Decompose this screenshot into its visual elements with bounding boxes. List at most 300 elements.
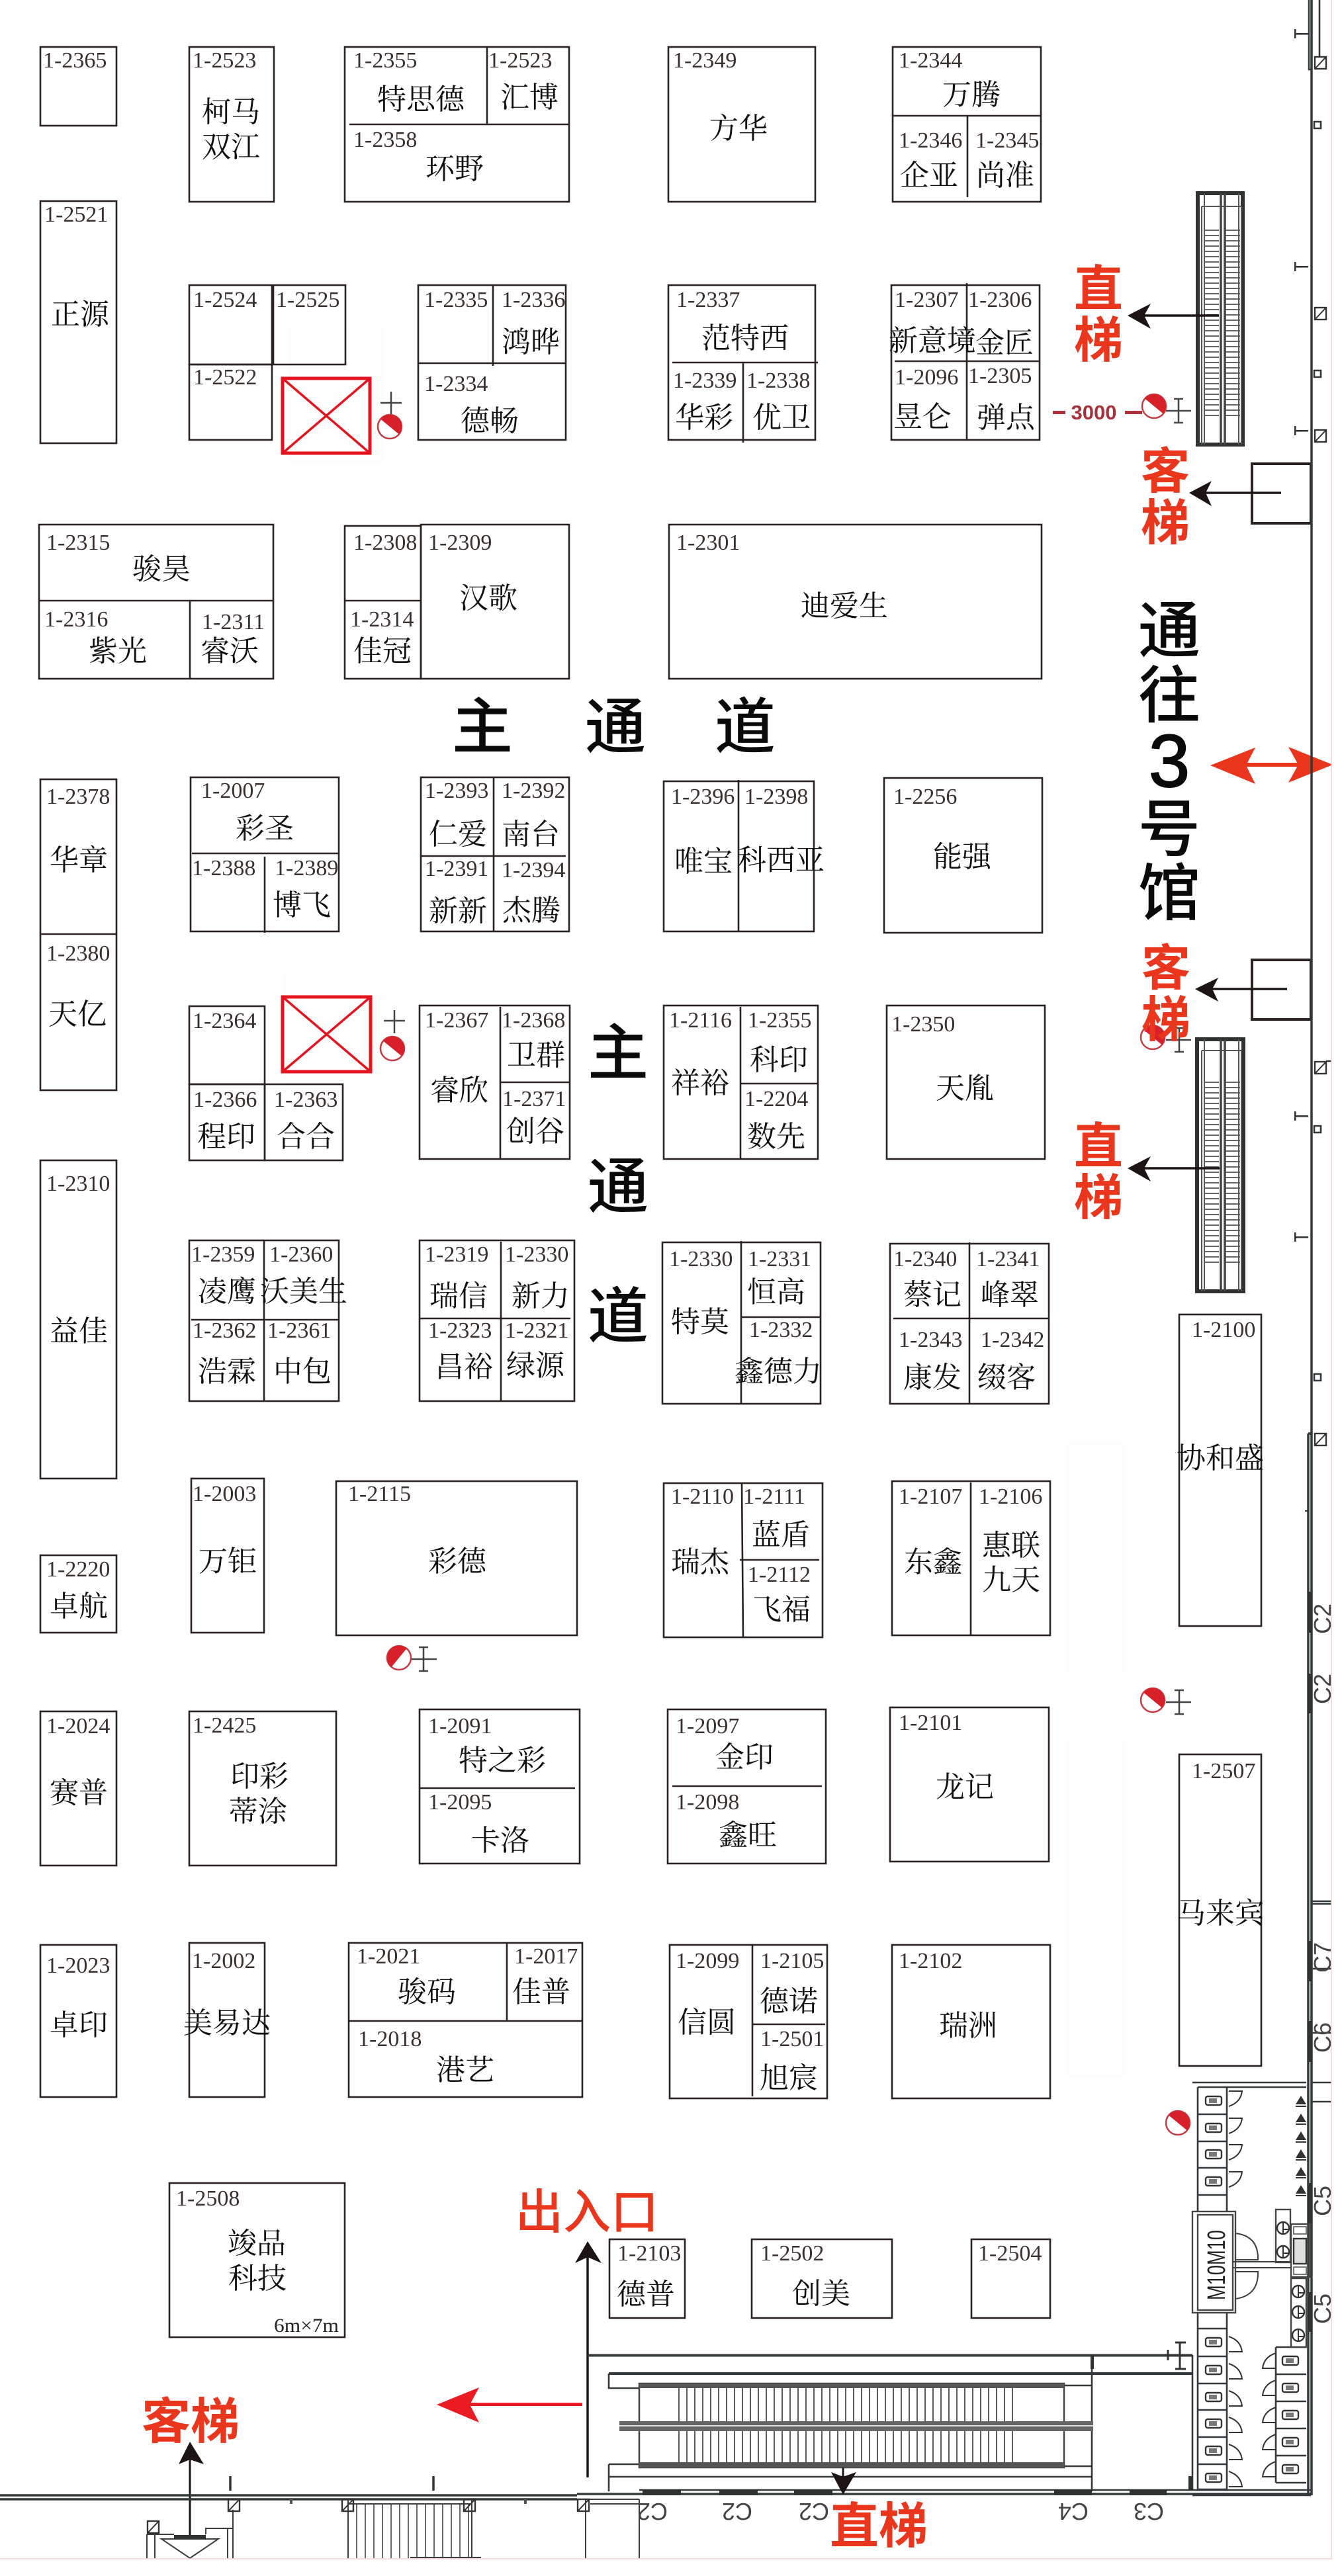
- booth block 1-2007 / 1-2388 / 1-2389: [191, 777, 339, 933]
- elevator box lower: [1252, 960, 1311, 1019]
- booth block 1-2107 / 1-2106: 惠联: [982, 1529, 1040, 1562]
- window labels C2 C2 C2 C4 C3 upside down: C2: [722, 2498, 752, 2525]
- booth block 1-2099 / 1-2105 / 1-2501: 旭宸: [760, 2062, 818, 2094]
- booth 1-2003 万钜: 万钜: [199, 1545, 257, 1578]
- booth block 1-2007 / 1-2388 / 1-2389: 1-2007: [201, 779, 265, 803]
- M10M10 room: [1192, 2211, 1292, 2313]
- booth 1-2507 马来宾: 1-2507: [1192, 1759, 1255, 1783]
- booth block 1-2337 / 1-2339 / 1-2338: 1-2338: [746, 368, 810, 393]
- booth block 1-2319 / 1-2330 / 1-2323 / 1-2321: 1-2323: [428, 1318, 492, 1343]
- booth block 1-2337 / 1-2339 / 1-2338: 1-2339: [673, 368, 737, 393]
- heading: 通往3号馆: 号: [1138, 794, 1200, 864]
- label: 直梯 top: 直: [1074, 261, 1123, 316]
- booth block 1-2393 / 1-2392 / 1-2391 / 1-2394: 仁爱: [429, 818, 487, 851]
- booth block 1-2367 / 1-2368 / 1-2371: 睿欣: [430, 1074, 488, 1107]
- booth block 1-2359 / 1-2360 / 1-2362 / 1-2361: [189, 1240, 347, 1401]
- booth block 1-2315 / 1-2316 / 1-2311: 紫光: [89, 635, 147, 667]
- upper stalls: [1198, 2091, 1242, 2195]
- booth 1-2023 卓印: 1-2023: [46, 1953, 110, 1978]
- booth block 1-2340 / 1-2341 / 1-2343 / 1-2342: 1-2341: [976, 1247, 1040, 1271]
- booth block 1-2107 / 1-2106: [892, 1481, 1050, 1635]
- booth 1-2425 印彩蒂涂: 印彩: [230, 1760, 289, 1793]
- booth 1-2256 能强: [884, 778, 1042, 933]
- booth block 1-2021 / 1-2017 / 1-2018: 1-2017: [514, 1944, 578, 1969]
- booth block 1-2110 / 1-2111 / 1-2112: 1-2111: [743, 1484, 805, 1509]
- booth block 1-2021 / 1-2017 / 1-2018: [349, 1943, 582, 2097]
- booth 1-2115 彩德: 1-2115: [348, 1482, 411, 1506]
- icon: fire hydrant 2: [380, 1010, 405, 1060]
- booth block 1-2091 / 1-2095: 卡洛: [471, 1825, 529, 1857]
- booth block 1-2340 / 1-2341 / 1-2343 / 1-2342: 1-2340: [893, 1247, 957, 1271]
- booth block 1-2110 / 1-2111 / 1-2112: 1-2110: [671, 1484, 734, 1509]
- booth block 1-2021 / 1-2017 / 1-2018: 1-2021: [357, 1944, 420, 1969]
- booth block 1-2330 / 1-2331 / 1-2332: 特莫: [671, 1306, 729, 1338]
- booth block 1-2396 / 1-2398: 唯宝: [674, 845, 733, 878]
- booth block 1-2344 / 1-2346 / 1-2345: 1-2344: [899, 48, 962, 73]
- booth block 1-2307 / 1-2306 / 1-2096 / 1-2305: 1-2306: [968, 288, 1032, 312]
- booth 1-2349 方华: 方华: [709, 112, 768, 145]
- booth 1-2310 益佳: 益佳: [50, 1315, 108, 1348]
- booth block 1-2307 / 1-2306 / 1-2096 / 1-2305: 弹点: [977, 402, 1036, 434]
- booth block 1-2315 / 1-2316 / 1-2311: 睿沃: [201, 635, 259, 667]
- booth block 1-2116 / 1-2355 / 1-2204: 科印: [750, 1044, 808, 1076]
- booth block 1-2315 / 1-2316 / 1-2311: 1-2311: [202, 610, 265, 634]
- booth 1-2508 竣品科技: 竣品: [228, 2227, 286, 2260]
- booth block 1-2091 / 1-2095: 1-2091: [428, 1714, 492, 1739]
- booth block 1-2330 / 1-2331 / 1-2332: 1-2330: [669, 1247, 733, 1271]
- booth block 1-2364 / 1-2366 / 1-2363: 程印: [197, 1121, 255, 1153]
- booth block 1-2337 / 1-2339 / 1-2338: 范特西: [701, 322, 789, 355]
- heading: 通往3号馆: 3: [1149, 720, 1190, 802]
- booth 1-2365: [40, 47, 116, 126]
- booth 1-2102 瑞洲: [892, 1945, 1050, 2098]
- booth 1-2507 马来宾: 马来宾: [1177, 1897, 1264, 1930]
- wall labels C2 C7 C6 C5: C6: [1309, 2022, 1336, 2053]
- booth block 1-2319 / 1-2330 / 1-2323 / 1-2321: 1-2330: [505, 1242, 568, 1267]
- booth 1-2301 迪爱生: [669, 525, 1042, 679]
- booth block 1-2378 / 1-2380: 华章: [50, 844, 108, 877]
- heading: 主通道 vertical: 道: [588, 1283, 648, 1351]
- booth 1-2256 能强: 能强: [933, 841, 992, 873]
- booth 1-2504: [971, 2239, 1050, 2318]
- booth 1-2102 瑞洲: 瑞洲: [939, 2010, 997, 2042]
- booth block 1-2021 / 1-2017 / 1-2018: 1-2018: [358, 2027, 422, 2051]
- booth block 1-2330 / 1-2331 / 1-2332: 恒高: [747, 1276, 805, 1309]
- booth block 1-2319 / 1-2330 / 1-2323 / 1-2321: 瑞信: [429, 1280, 488, 1312]
- booth block 1-2335 / 1-2336 / 1-2334: 鸿晔: [502, 326, 560, 359]
- booth block 1-2340 / 1-2341 / 1-2343 / 1-2342: 缀客: [977, 1361, 1036, 1394]
- booth 1-2508 竣品科技: 科技: [228, 2262, 287, 2295]
- booth block 1-2107 / 1-2106: 九天: [982, 1564, 1040, 1596]
- booth block 1-2396 / 1-2398: 1-2398: [744, 785, 808, 809]
- white margin beyond edge: [1332, 0, 1340, 2576]
- arrow: down to bottom escalator label: [831, 2468, 856, 2495]
- label: 直梯 lower: 直: [1074, 1119, 1123, 1174]
- arrow to escalator label top: [1128, 304, 1219, 329]
- booth block 1-2355 / 1-2523 / 1-2358: [345, 47, 569, 202]
- booth 1-2256 能强: 1-2256: [893, 785, 957, 809]
- booth block 1-2378 / 1-2380: 1-2380: [46, 941, 110, 966]
- booth 1-2115 彩德: [336, 1481, 577, 1635]
- booth block 1-2330 / 1-2331 / 1-2332: 鑫德力: [735, 1355, 822, 1388]
- booth block 1-2091 / 1-2095: 1-2095: [428, 1790, 492, 1815]
- booth block 1-2337 / 1-2339 / 1-2338: 华彩: [675, 402, 733, 434]
- booth 1-2523 柯马双江: 1-2523: [193, 48, 256, 73]
- booth block 1-2099 / 1-2105 / 1-2501: 1-2099: [676, 1949, 739, 1973]
- booth block 1-2110 / 1-2111 / 1-2112: 1-2112: [748, 1563, 811, 1587]
- booth 1-2502 创美: 创美: [792, 2278, 850, 2310]
- booth 1-2024 赛普: [40, 1711, 116, 1866]
- booth block 1-2393 / 1-2392 / 1-2391 / 1-2394: 南台: [502, 818, 560, 851]
- booth block 1-2367 / 1-2368 / 1-2371: 1-2368: [502, 1008, 565, 1033]
- booth 1-2523 柯马双江: 柯马: [202, 96, 260, 128]
- booth 1-2504: 1-2504: [978, 2241, 1042, 2266]
- booth block 1-2097 / 1-2098: [668, 1709, 826, 1864]
- booth block 1-2367 / 1-2368 / 1-2371: 卫群: [507, 1039, 565, 1072]
- booth 1-2350 天胤: [887, 1006, 1045, 1159]
- booth 1-2523 柯马双江: 双江: [202, 131, 260, 163]
- booth block 1-2335 / 1-2336 / 1-2334: 1-2336: [502, 288, 565, 312]
- booth block 1-2110 / 1-2111 / 1-2112: [664, 1483, 823, 1637]
- booth 1-2310 益佳: [40, 1160, 116, 1479]
- booth block 1-2359 / 1-2360 / 1-2362 / 1-2361: 1-2361: [267, 1318, 331, 1343]
- booth block 1-2359 / 1-2360 / 1-2362 / 1-2361: 凌鹰: [198, 1275, 256, 1308]
- booth block 1-2110 / 1-2111 / 1-2112: 飞福: [752, 1594, 811, 1626]
- booth block 1-2021 / 1-2017 / 1-2018: 佳普: [512, 1976, 570, 2008]
- booth block 1-2355 / 1-2523 / 1-2358: 特思德: [377, 83, 465, 116]
- arrow to elevator label lower: [1195, 978, 1287, 1002]
- booth block 1-2359 / 1-2360 / 1-2362 / 1-2361: 1-2362: [193, 1318, 256, 1343]
- booth block 1-2393 / 1-2392 / 1-2391 / 1-2394: 1-2393: [425, 779, 488, 803]
- label: 直梯 top: 梯: [1074, 313, 1123, 368]
- red double arrow to hall 3: [1210, 747, 1333, 784]
- booth block 1-2393 / 1-2392 / 1-2391 / 1-2394: 1-2392: [502, 779, 565, 803]
- label: 直梯 top: [1074, 261, 1123, 368]
- booth block 1-2335 / 1-2336 / 1-2334: 德畅: [461, 405, 519, 437]
- booth 1-2508 竣品科技: [169, 2183, 345, 2337]
- booth block 1-2355 / 1-2523 / 1-2358: 1-2358: [353, 128, 417, 152]
- booth block 1-2307 / 1-2306 / 1-2096 / 1-2305: 新意境: [889, 325, 976, 357]
- heading: 主通道 vertical: [588, 1020, 648, 1351]
- label: 客梯 top: 梯: [1141, 495, 1190, 550]
- booth block 1-2396 / 1-2398: [664, 780, 825, 931]
- booth block 1-2330 / 1-2331 / 1-2332: 1-2332: [749, 1318, 813, 1342]
- booth block 1-2099 / 1-2105 / 1-2501: 德诺: [760, 1985, 818, 2018]
- booth 1-2115 彩德: 彩德: [428, 1545, 487, 1578]
- booth 1-2425 印彩蒂涂: [189, 1711, 336, 1866]
- wall labels C2 C7 C6 C5: C5: [1309, 2294, 1336, 2324]
- wall labels C2 C7 C6 C5: C2: [1309, 1674, 1336, 1704]
- label: 客梯 top: 客: [1141, 444, 1190, 499]
- booth block 1-2307 / 1-2306 / 1-2096 / 1-2305: [889, 283, 1040, 440]
- booth 1-2425 印彩蒂涂: 蒂涂: [229, 1795, 287, 1828]
- booth block 1-2308 / 1-2314 / 1-2309: [345, 525, 569, 679]
- booth block 1-2315 / 1-2316 / 1-2311: 1-2315: [46, 531, 110, 555]
- booth block 1-2378 / 1-2380: 天亿: [48, 998, 107, 1031]
- booth block 1-2524 / 1-2525 / 1-2522: [189, 285, 345, 440]
- heading: 通往3号馆: 通: [1138, 596, 1200, 665]
- booth block 1-2364 / 1-2366 / 1-2363: 1-2363: [274, 1088, 337, 1112]
- booth block 1-2335 / 1-2336 / 1-2334: 1-2334: [424, 372, 488, 396]
- arrow to elevator label top: [1189, 481, 1281, 506]
- booth 1-2002 美易达: 1-2002: [192, 1949, 255, 1973]
- window labels C2 C2 C2 C4 C3 upside down: [637, 2498, 1164, 2525]
- booth 1-2521 正源: 1-2521: [44, 202, 108, 227]
- booth 1-2024 赛普: 1-2024: [46, 1714, 110, 1739]
- booth block 1-2307 / 1-2306 / 1-2096 / 1-2305: 1-2307: [895, 288, 958, 312]
- booth 1-2220 卓航: 卓航: [50, 1590, 108, 1623]
- window labels C2 C2 C2 C4 C3 upside down: C2: [799, 2498, 829, 2525]
- booth block 1-2337 / 1-2339 / 1-2338: 1-2337: [676, 288, 740, 312]
- booth block 1-2315 / 1-2316 / 1-2311: [39, 525, 273, 679]
- booth 1-2103 德普: 1-2103: [617, 2241, 681, 2266]
- booth block 1-2099 / 1-2105 / 1-2501: 信圆: [678, 2006, 736, 2039]
- booth 1-2502 创美: [752, 2239, 892, 2318]
- M10M10 room: M10M10: [1203, 2230, 1231, 2300]
- booth 1-2023 卓印: 卓印: [50, 2009, 108, 2041]
- booth block 1-2344 / 1-2346 / 1-2345: [893, 47, 1041, 202]
- arrow: up to bottom elevator label: [179, 2442, 204, 2536]
- heading: 通往3号馆: [1138, 596, 1200, 928]
- booth block 1-2116 / 1-2355 / 1-2204: 祥裕: [671, 1067, 729, 1099]
- booth 1-2349 方华: 1-2349: [673, 48, 737, 73]
- bottom escalator hall: [588, 2355, 1192, 2491]
- booth 1-2508 竣品科技: 6m×7m: [274, 2315, 339, 2337]
- booth block 1-2110 / 1-2111 / 1-2112: 瑞杰: [671, 1546, 730, 1578]
- booth block 1-2116 / 1-2355 / 1-2204: [664, 1006, 818, 1159]
- booth block 1-2364 / 1-2366 / 1-2363: 合合: [277, 1121, 335, 1153]
- booth block 1-2364 / 1-2366 / 1-2363: 1-2364: [193, 1009, 256, 1033]
- booth block 1-2364 / 1-2366 / 1-2363: [189, 1006, 343, 1160]
- booth 1-2301 迪爱生: 迪爱生: [801, 590, 888, 623]
- booth 1-2523 柯马双江: [189, 47, 274, 202]
- booth 1-2521 正源: [40, 201, 116, 443]
- icon: fire hydrant 5: [1141, 1688, 1191, 1714]
- booth 1-2350 天胤: 天胤: [936, 1072, 994, 1105]
- window labels C2 C2 C2 C4 C3 upside down: C3: [1134, 2498, 1164, 2525]
- booth block 1-2107 / 1-2106: 1-2106: [979, 1484, 1042, 1509]
- booth block 1-2393 / 1-2392 / 1-2391 / 1-2394: 新新: [429, 895, 487, 927]
- booth block 1-2340 / 1-2341 / 1-2343 / 1-2342: 峰翠: [981, 1279, 1039, 1311]
- heading: 主通道 horizontal: 主: [452, 694, 513, 761]
- escalator lower right: [1197, 1039, 1243, 1291]
- booth block 1-2116 / 1-2355 / 1-2204: 1-2355: [748, 1008, 811, 1033]
- bottom left building structure: [147, 2476, 639, 2558]
- booth 1-2103 德普: 德普: [617, 2278, 675, 2311]
- booth block 1-2308 / 1-2314 / 1-2309: 1-2314: [350, 607, 414, 632]
- booth 1-2350 天胤: 1-2350: [891, 1012, 955, 1037]
- booth 1-2002 美易达: [183, 1943, 271, 2097]
- dimension label 3000 with hydrant: [1053, 394, 1191, 424]
- wall labels C2 C7 C6 C5: C7: [1309, 1942, 1336, 1973]
- booth block 1-2355 / 1-2523 / 1-2358: 1-2523: [488, 48, 552, 73]
- booth 1-2101 龙记: 1-2101: [899, 1711, 962, 1735]
- booth 1-2425 印彩蒂涂: 1-2425: [193, 1713, 256, 1738]
- booth block 1-2344 / 1-2346 / 1-2345: 企亚: [900, 159, 958, 192]
- booth block 1-2367 / 1-2368 / 1-2371: 创谷: [506, 1115, 564, 1148]
- booth block 1-2524 / 1-2525 / 1-2522: 1-2522: [193, 365, 257, 390]
- booth block 1-2355 / 1-2523 / 1-2358: 汇博: [500, 81, 558, 114]
- booth block 1-2116 / 1-2355 / 1-2204: 1-2116: [669, 1008, 732, 1033]
- booth block 1-2335 / 1-2336 / 1-2334: 1-2335: [424, 288, 488, 312]
- booth block 1-2344 / 1-2346 / 1-2345: 尚准: [976, 159, 1034, 192]
- booth 1-2310 益佳: 1-2310: [46, 1172, 110, 1196]
- booth 1-2301 迪爱生: 1-2301: [676, 531, 740, 555]
- booth block 1-2344 / 1-2346 / 1-2345: 1-2346: [899, 128, 962, 153]
- booth block 1-2355 / 1-2523 / 1-2358: 1-2355: [353, 48, 417, 73]
- booth block 1-2308 / 1-2314 / 1-2309: 佳冠: [353, 635, 412, 667]
- icon: red crossed column 1: [283, 378, 370, 453]
- label: 客梯 lower: 梯: [1141, 992, 1190, 1047]
- booth block 1-2319 / 1-2330 / 1-2323 / 1-2321: 绿源: [506, 1350, 565, 1382]
- booth 1-2220 卓航: 1-2220: [46, 1557, 110, 1582]
- booth block 1-2307 / 1-2306 / 1-2096 / 1-2305: 1-2305: [968, 364, 1032, 388]
- window labels C2 C2 C2 C4 C3 upside down: C4: [1058, 2498, 1089, 2525]
- booth block 1-2021 / 1-2017 / 1-2018: 港艺: [436, 2054, 494, 2086]
- booth block 1-2107 / 1-2106: 1-2107: [899, 1484, 962, 1509]
- booth block 1-2359 / 1-2360 / 1-2362 / 1-2361: 1-2360: [269, 1242, 333, 1267]
- booth block 1-2524 / 1-2525 / 1-2522: 1-2524: [193, 288, 257, 312]
- booth block 1-2359 / 1-2360 / 1-2362 / 1-2361: 沃美生: [260, 1275, 347, 1308]
- booth 1-2101 龙记: 龙记: [936, 1771, 994, 1803]
- booth block 1-2367 / 1-2368 / 1-2371: 1-2367: [425, 1008, 488, 1033]
- utility closet: [1291, 2224, 1310, 2277]
- restroom: [1188, 2082, 1310, 2490]
- label: 直梯 lower: [1074, 1119, 1123, 1225]
- booth block 1-2315 / 1-2316 / 1-2311: 骏昊: [132, 553, 191, 585]
- escalator top right: [1198, 193, 1243, 445]
- booth block 1-2393 / 1-2392 / 1-2391 / 1-2394: 1-2394: [502, 858, 565, 882]
- lower stalls: [1198, 2329, 1242, 2489]
- right stalls: [1263, 2347, 1306, 2483]
- wall labels C2 C7 C6 C5: [1309, 1604, 1336, 2324]
- booth block 1-2007 / 1-2388 / 1-2389: 彩圣: [236, 812, 294, 845]
- label: 客梯 lower: [1141, 941, 1190, 1047]
- icon: fire hydrant 4: [387, 1646, 437, 1671]
- booth block 1-2344 / 1-2346 / 1-2345: 万腾: [942, 79, 1001, 111]
- booth block 1-2116 / 1-2355 / 1-2204: 1-2204: [744, 1087, 808, 1111]
- booth 1-2100 协和盛: 协和盛: [1177, 1442, 1264, 1475]
- booth block 1-2340 / 1-2341 / 1-2343 / 1-2342: [890, 1242, 1049, 1404]
- booth block 1-2097 / 1-2098: 1-2097: [676, 1714, 739, 1739]
- booth 1-2365: 1-2365: [43, 48, 107, 73]
- arrow: up to entrance: [575, 2241, 602, 2477]
- booth block 1-2099 / 1-2105 / 1-2501: [670, 1945, 827, 2098]
- heading: 主通道 horizontal: 道: [715, 694, 776, 761]
- booth block 1-2307 / 1-2306 / 1-2096 / 1-2305: 金匠: [975, 327, 1034, 359]
- booth block 1-2319 / 1-2330 / 1-2323 / 1-2321: 1-2319: [425, 1242, 488, 1267]
- arrow to escalator label lower: [1128, 1156, 1220, 1181]
- booth block 1-2107 / 1-2106: 东鑫: [904, 1546, 962, 1578]
- booth 1-2100 协和盛: 1-2100: [1192, 1318, 1255, 1342]
- sinks: [1276, 2210, 1306, 2347]
- booth block 1-2097 / 1-2098: 1-2098: [676, 1790, 739, 1815]
- booth block 1-2319 / 1-2330 / 1-2323 / 1-2321: 新力: [512, 1280, 570, 1312]
- booth block 1-2367 / 1-2368 / 1-2371: [420, 1006, 570, 1159]
- icon: fire hydrant 1: [378, 392, 402, 439]
- booth 1-2502 创美: 1-2502: [760, 2241, 824, 2266]
- heading: 主通道 vertical: 通: [588, 1154, 648, 1221]
- icon: red crossed column 2: [283, 997, 371, 1072]
- booth block 1-2359 / 1-2360 / 1-2362 / 1-2361: 浩霖: [198, 1355, 256, 1388]
- booth block 1-2396 / 1-2398: 科西亚: [737, 844, 825, 877]
- booth 1-2349 方华: [668, 47, 815, 202]
- dimension label 3000 with hydrant: 3000: [1071, 401, 1116, 424]
- booth block 1-2330 / 1-2331 / 1-2332: 1-2331: [748, 1247, 811, 1271]
- heading: 通往3号馆: 馆: [1138, 859, 1200, 928]
- window labels C2 C2 C2 C4 C3 upside down: C2: [637, 2498, 668, 2525]
- booth block 1-2393 / 1-2392 / 1-2391 / 1-2394: 1-2391: [425, 857, 488, 881]
- booth 1-2508 竣品科技: 1-2508: [176, 2186, 240, 2211]
- booth block 1-2396 / 1-2398: 1-2396: [671, 785, 735, 809]
- booth block 1-2319 / 1-2330 / 1-2323 / 1-2321: 1-2321: [505, 1318, 568, 1343]
- heading: 主通道 vertical: 主: [588, 1020, 648, 1088]
- heading: 主通道 horizontal: [452, 694, 776, 761]
- booth block 1-2308 / 1-2314 / 1-2309: 1-2309: [428, 531, 492, 555]
- booth block 1-2359 / 1-2360 / 1-2362 / 1-2361: 1-2359: [191, 1242, 255, 1267]
- booth block 1-2099 / 1-2105 / 1-2501: 1-2105: [760, 1949, 824, 1973]
- arrow: red left: [437, 2387, 582, 2423]
- booth block 1-2007 / 1-2388 / 1-2389: 博飞: [273, 889, 331, 922]
- booth block 1-2307 / 1-2306 / 1-2096 / 1-2305: 昱仑: [893, 401, 952, 433]
- booth block 1-2337 / 1-2339 / 1-2338: [668, 285, 818, 443]
- booth block 1-2319 / 1-2330 / 1-2323 / 1-2321: [420, 1240, 574, 1401]
- booth block 1-2340 / 1-2341 / 1-2343 / 1-2342: 蔡记: [903, 1279, 961, 1311]
- booth block 1-2364 / 1-2366 / 1-2363: 1-2366: [193, 1088, 257, 1112]
- label: 直梯 lower: 梯: [1074, 1170, 1123, 1225]
- booth 1-2101 龙记: [890, 1707, 1049, 1862]
- booth 1-2102 瑞洲: 1-2102: [899, 1949, 962, 1973]
- label: 客梯 top: [1141, 444, 1190, 550]
- booth block 1-2315 / 1-2316 / 1-2311: 1-2316: [44, 607, 108, 632]
- booth block 1-2097 / 1-2098: 鑫旺: [719, 1819, 777, 1852]
- booth 1-2023 卓印: [40, 1945, 116, 2097]
- booth block 1-2099 / 1-2105 / 1-2501: 1-2501: [760, 2027, 824, 2051]
- wall labels C2 C7 C6 C5: C5: [1309, 2186, 1336, 2216]
- booth block 1-2007 / 1-2388 / 1-2389: 1-2389: [275, 856, 338, 880]
- booth block 1-2308 / 1-2314 / 1-2309: 汉歌: [459, 582, 517, 615]
- label: 出入口: 出入口: [515, 2186, 658, 2239]
- booth block 1-2359 / 1-2360 / 1-2362 / 1-2361: 中包: [273, 1355, 332, 1388]
- booth block 1-2116 / 1-2355 / 1-2204: 数先: [747, 1121, 805, 1153]
- booth block 1-2378 / 1-2380: 1-2378: [46, 785, 110, 809]
- booth block 1-2340 / 1-2341 / 1-2343 / 1-2342: 1-2343: [899, 1328, 962, 1352]
- booth block 1-2091 / 1-2095: [420, 1709, 580, 1864]
- booth block 1-2337 / 1-2339 / 1-2338: 优卫: [752, 402, 811, 434]
- icon: fire hydrant 3: [1141, 1025, 1191, 1052]
- booth block 1-2378 / 1-2380: [40, 779, 116, 1090]
- booth 1-2100 协和盛: [1177, 1314, 1264, 1626]
- booth 1-2220 卓航: [40, 1555, 116, 1633]
- booth block 1-2007 / 1-2388 / 1-2389: 1-2388: [192, 856, 255, 880]
- label: 直梯 bottom: 直梯: [830, 2499, 928, 2554]
- booth block 1-2110 / 1-2111 / 1-2112: 蓝盾: [752, 1519, 810, 1551]
- booth block 1-2355 / 1-2523 / 1-2358: 环野: [425, 153, 484, 185]
- booth block 1-2097 / 1-2098: 金印: [715, 1741, 774, 1774]
- booth block 1-2367 / 1-2368 / 1-2371: 1-2371: [502, 1087, 566, 1111]
- heading: 主通道 horizontal: 通: [585, 694, 646, 761]
- icon: column marker near restroom: [1168, 2342, 1192, 2369]
- booth block 1-2335 / 1-2336 / 1-2334: [418, 285, 566, 440]
- label: 客梯 lower: 客: [1141, 941, 1190, 996]
- booth block 1-2319 / 1-2330 / 1-2323 / 1-2321: 昌裕: [435, 1351, 493, 1383]
- booth 1-2024 赛普: 赛普: [50, 1777, 108, 1809]
- booth block 1-2524 / 1-2525 / 1-2522: 1-2525: [276, 288, 339, 312]
- booth block 1-2091 / 1-2095: 特之彩: [459, 1744, 546, 1777]
- label: 客梯 bottom: 客梯: [142, 2394, 240, 2449]
- faint background patches: [285, 329, 1125, 2077]
- booth block 1-2308 / 1-2314 / 1-2309: 1-2308: [353, 531, 417, 555]
